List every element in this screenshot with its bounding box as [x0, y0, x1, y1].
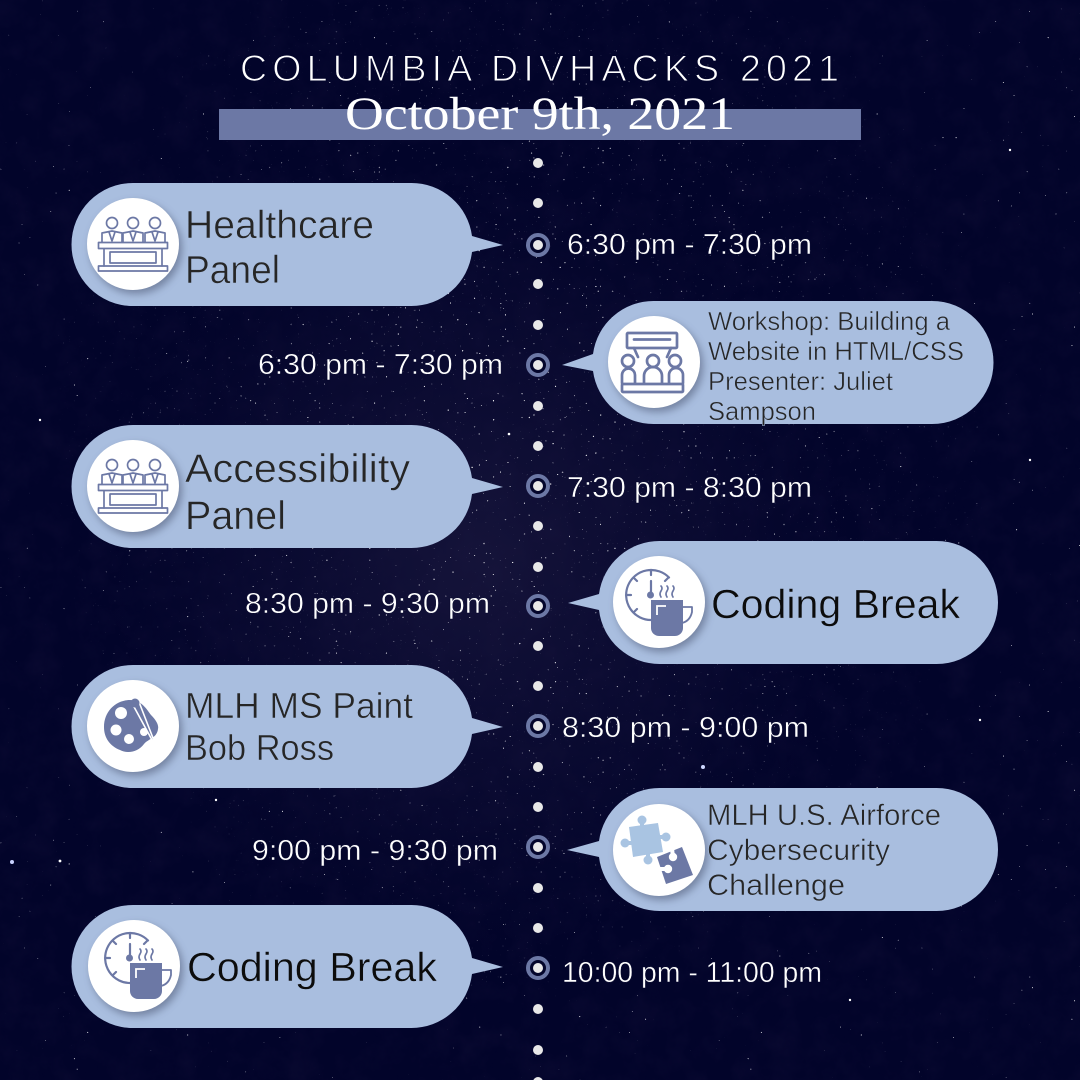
panel: cybersecurity challenge — [567, 788, 998, 911]
time: website workshop: 6:30 pm - 7:30 pm — [258, 349, 503, 381]
speech bubble — [71, 183, 503, 306]
label: Coding Break — [711, 581, 960, 627]
label: Workshop: Building a — [708, 306, 951, 336]
icon: panel of speakers — [87, 198, 182, 294]
speech bubble — [562, 301, 994, 424]
label: Coding Break — [187, 944, 437, 990]
timeline ring markers — [528, 235, 548, 978]
time: coding break right: 8:30 pm - 9:30 pm — [245, 588, 490, 620]
time: cybersecurity challenge: 9:00 pm - 9:30 pm — [252, 835, 498, 867]
time: MS Paint Bob Ross: 8:30 pm - 9:00 pm — [562, 712, 809, 744]
timeline dots — [533, 158, 543, 1080]
icon: clock and coffee mug — [613, 556, 708, 652]
icon: workshop audience — [608, 316, 703, 412]
label: Bob Ross — [185, 727, 334, 768]
label: MLH MS Paint — [185, 685, 413, 726]
label: Panel — [185, 249, 280, 292]
panel: coding break right — [568, 541, 998, 664]
label: Presenter: Juliet — [708, 366, 894, 396]
panel: MS Paint Bob Ross — [71, 665, 503, 788]
date banner — [219, 88, 861, 140]
speech bubble — [71, 665, 503, 788]
icon: panel of speakers — [87, 440, 182, 536]
panel: website workshop — [562, 301, 994, 426]
time: accessibility panel: 7:30 pm - 8:30 pm — [567, 472, 812, 504]
label: Healthcare — [185, 204, 374, 247]
speech bubble — [567, 788, 998, 911]
speech bubble — [568, 541, 998, 664]
label: Website in HTML/CSS — [708, 336, 964, 366]
time: coding break left: 10:00 pm - 11:00 pm — [562, 957, 822, 989]
panel: accessibility panel — [71, 425, 503, 548]
label: Accessibility — [185, 447, 410, 491]
label: Panel — [185, 494, 286, 538]
icon: clock and coffee mug — [88, 920, 183, 1016]
time: healthcare panel: 6:30 pm - 7:30 pm — [567, 229, 812, 261]
date heading: October 9th, 2021 — [345, 88, 735, 140]
panel: coding break left — [71, 905, 503, 1028]
speech bubble — [71, 425, 503, 548]
label: Challenge — [707, 869, 845, 902]
title: COLUMBIA DIVHACKS 2021 — [240, 47, 839, 89]
panel: healthcare panel — [71, 183, 503, 306]
label: Cybersecurity — [707, 834, 890, 867]
icon: paint palette — [87, 680, 182, 776]
label: Sampson — [708, 396, 816, 426]
icon: puzzle pieces — [613, 804, 708, 900]
speech bubble — [71, 905, 503, 1028]
label: MLH U.S. Airforce — [707, 799, 941, 832]
